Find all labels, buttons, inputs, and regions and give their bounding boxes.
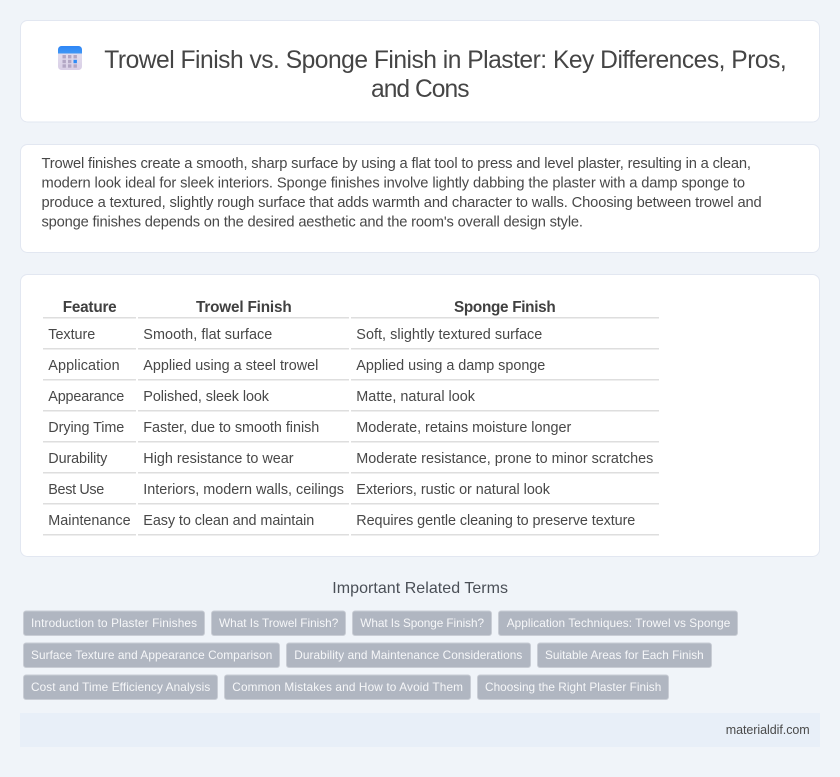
tag: what is sponge finish <box>352 611 492 636</box>
tag: durability <box>286 643 530 668</box>
row: texture: Smooth, flat surface <box>143 327 272 343</box>
title: and Cons <box>371 76 470 103</box>
row: durability <box>43 451 659 474</box>
table header: Feature <box>63 299 117 316</box>
tag: cost and time <box>24 675 218 700</box>
text block: introduction paragraph: produce a textured, slightly rough surface that adds warmth and character to walls. Choosing between trowel and <box>42 195 762 211</box>
tag: cost and time: Cost and Time Efficiency Analysis <box>31 680 210 694</box>
row: application: Application <box>48 358 120 374</box>
row: drying time: Drying Time <box>48 420 124 436</box>
row: best use: Best Use <box>48 482 104 498</box>
tag: suitable areas: Suitable Areas for Each Finish <box>545 648 704 662</box>
tag: surface texture: Surface Texture and Appearance Comparison <box>31 648 272 662</box>
tag: surface texture <box>24 643 280 668</box>
text block: introduction paragraph: Trowel finishes create a smooth, sharp surface by using a flat tool to press and level plaster, resulting in a clean, <box>42 156 751 172</box>
tag: what is trowel finish: What Is Trowel Finish? <box>219 616 339 630</box>
row: maintenance: Easy to clean and maintain <box>143 513 314 529</box>
text block: introduction paragraph <box>42 156 762 230</box>
row: texture: Soft, slightly textured surface <box>356 327 542 343</box>
footer: materialdif.com <box>726 723 810 737</box>
text block: introduction paragraph: sponge finishes depends on the desired aesthetic and the room's overall design style. <box>42 214 583 230</box>
row: drying time: Moderate, retains moisture longer <box>356 420 572 436</box>
row: application <box>43 358 659 380</box>
panel: introduction <box>20 144 820 252</box>
related term tags <box>24 611 738 700</box>
tag: durability: Durability and Maintenance Considerations <box>294 648 522 662</box>
row: drying time <box>43 420 659 442</box>
row: application: Applied using a steel trowel <box>143 358 318 374</box>
text block: introduction paragraph: modern look ideal for sleek interiors. Sponge finishes involve lightly dabbing the plaster with a damp sponge to <box>42 176 745 192</box>
row: texture <box>43 327 659 350</box>
row: appearance: Matte, natural look <box>356 389 476 405</box>
tag: what is sponge finish: What Is Sponge Finish? <box>360 616 484 630</box>
tag: choosing <box>478 675 668 700</box>
heading: important related terms: Important Related Terms <box>332 580 508 597</box>
table header: Sponge Finish <box>454 299 556 316</box>
table header <box>43 299 659 318</box>
row: maintenance <box>43 513 659 536</box>
row: durability: High resistance to wear <box>143 451 294 467</box>
row: maintenance: Requires gentle cleaning to preserve texture <box>356 513 635 529</box>
row: best use: Interiors, modern walls, ceilings <box>143 482 344 498</box>
row: durability: Moderate resistance, prone to minor scratches <box>356 451 653 467</box>
tag: choosing: Choosing the Right Plaster Finish <box>485 680 661 694</box>
row: drying time: Faster, due to smooth finish <box>143 420 319 436</box>
tag: introduction: Introduction to Plaster Finishes <box>31 616 197 630</box>
title <box>104 47 787 103</box>
row: durability: Durability <box>48 451 108 467</box>
row: best use: Exteriors, rustic or natural look <box>356 482 551 498</box>
tag: common mistakes: Common Mistakes and How to Avoid Them <box>232 680 463 694</box>
row: best use <box>43 482 659 504</box>
row: maintenance: Maintenance <box>48 513 131 529</box>
table header: Trowel Finish <box>196 299 292 316</box>
icon: calendar <box>58 46 82 70</box>
tag: suitable areas <box>538 643 712 668</box>
tag: what is trowel finish <box>212 611 346 636</box>
panel: title card <box>20 20 820 122</box>
row: texture: Texture <box>48 327 95 343</box>
tag: application techniques: Application Techniques: Trowel vs Sponge <box>507 616 731 630</box>
title: Trowel Finish vs. Sponge Finish in Plaster: Key Differences, Pros, <box>104 47 787 74</box>
row: appearance: Polished, sleek look <box>143 389 270 405</box>
row: appearance: Appearance <box>48 389 124 405</box>
row: appearance <box>43 389 659 412</box>
footer <box>20 713 820 747</box>
tag: application techniques <box>498 611 738 636</box>
panel: comparison table <box>20 274 820 556</box>
tag: common mistakes <box>224 675 470 700</box>
tag: introduction <box>24 611 204 636</box>
row: application: Applied using a damp sponge <box>356 358 545 374</box>
